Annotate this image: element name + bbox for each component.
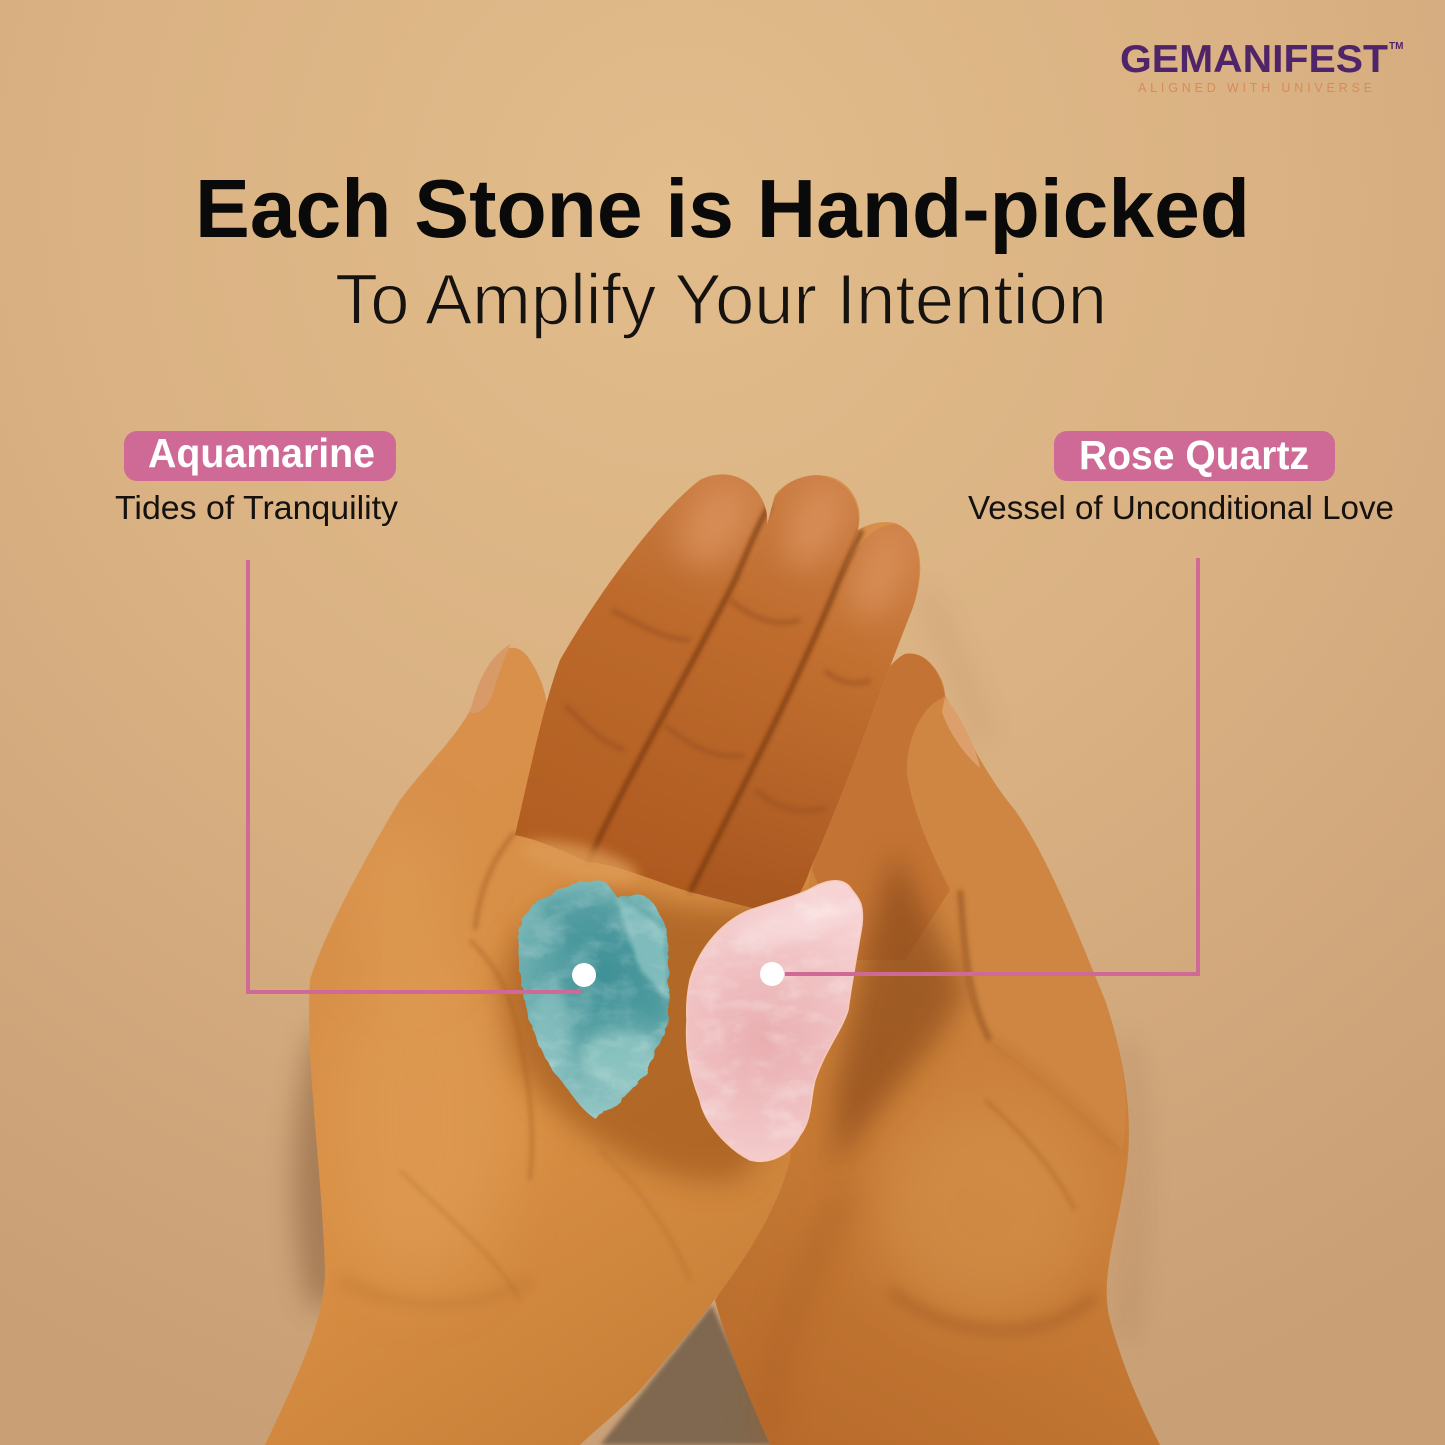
right thumb [907, 697, 1126, 1150]
logo: ALIGNED WITH UNIVERSE [1138, 81, 1372, 95]
finger: middle [588, 475, 859, 892]
finger tip highlights [675, 486, 751, 570]
marker dot: rose quartz [760, 962, 784, 986]
callout line: rose quartz [785, 558, 1198, 974]
label: aquamarine: Aquamarine [148, 430, 375, 476]
logo: TM [1389, 41, 1403, 52]
thumb inner edge [475, 832, 515, 930]
stone: rose quartz [686, 880, 864, 1162]
palm light [354, 994, 488, 1267]
logo [1120, 38, 1403, 95]
title: Each Stone is Hand-picked [195, 162, 1250, 255]
stone: aquamarine [518, 880, 670, 1119]
subtitle: To Amplify Your Intention [335, 261, 1107, 340]
caption: aquamarine: Tides of Tranquility [115, 489, 399, 526]
right palm light [875, 1100, 1095, 1320]
right hand [715, 653, 1160, 1445]
finger: index [515, 474, 767, 862]
callout line: aquamarine [248, 560, 582, 992]
right hand finger behind [812, 653, 950, 960]
left hand [265, 471, 920, 1445]
marker dot: aquamarine [572, 963, 596, 987]
caption: rose quartz: Vessel of Unconditional Love [968, 489, 1394, 526]
logo: GEMANIFEST [1120, 38, 1388, 81]
cast shadow of hands [294, 1030, 345, 1310]
finger joints [565, 600, 870, 811]
right hand cupping shade [835, 850, 965, 1170]
palm cupping shade [500, 885, 860, 1182]
finger: ring [690, 524, 919, 914]
gaps between fingers [588, 505, 862, 892]
thumbnail [470, 644, 511, 713]
label: rose quartz: Rose Quartz [1079, 432, 1309, 478]
hands holding two stones [265, 471, 1160, 1445]
